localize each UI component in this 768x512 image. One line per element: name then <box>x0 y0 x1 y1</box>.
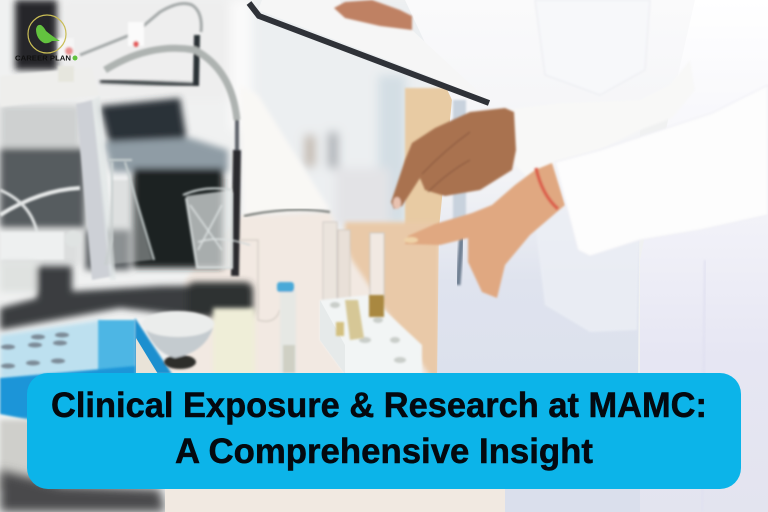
equipment behind glass <box>0 0 228 270</box>
second hand and wrist band <box>404 163 565 298</box>
bottom strip below banner <box>0 420 640 512</box>
sleeve of doctor two <box>555 85 768 256</box>
hand on clipboard <box>334 0 412 30</box>
sleeve of doctor one <box>503 60 695 178</box>
title line 1: Clinical Exposure & Research at MAMC: <box>51 386 707 425</box>
instrument panel <box>0 231 81 260</box>
cylinder <box>213 308 255 376</box>
doctor one: lab coat <box>405 0 700 512</box>
title line 2: A Comprehensive Insight <box>175 432 593 471</box>
clipboard edge <box>249 3 489 103</box>
beaker <box>183 188 250 268</box>
capped test tube <box>277 282 296 374</box>
glass enclosure <box>0 66 116 280</box>
petri dish <box>142 311 214 369</box>
logo: Career Plan <box>15 15 78 62</box>
conical flask <box>105 160 154 265</box>
logo wordmark: CAREER PLAN <box>15 54 71 62</box>
background beaker <box>240 240 280 321</box>
logo ring <box>28 15 66 53</box>
clipboard <box>249 0 489 103</box>
blurred foreground apparatus <box>0 262 253 330</box>
title banner <box>27 373 741 489</box>
logo dot <box>72 56 78 60</box>
doctor two: lab coat <box>640 0 768 512</box>
bench top <box>165 85 430 376</box>
blue tray and well plate <box>0 318 172 420</box>
pointing hand <box>391 108 516 209</box>
test tube rack <box>320 222 422 374</box>
banner background <box>27 373 741 489</box>
clipboard paper <box>258 0 482 95</box>
icon: green bird <box>36 25 60 43</box>
tubing <box>0 4 237 276</box>
